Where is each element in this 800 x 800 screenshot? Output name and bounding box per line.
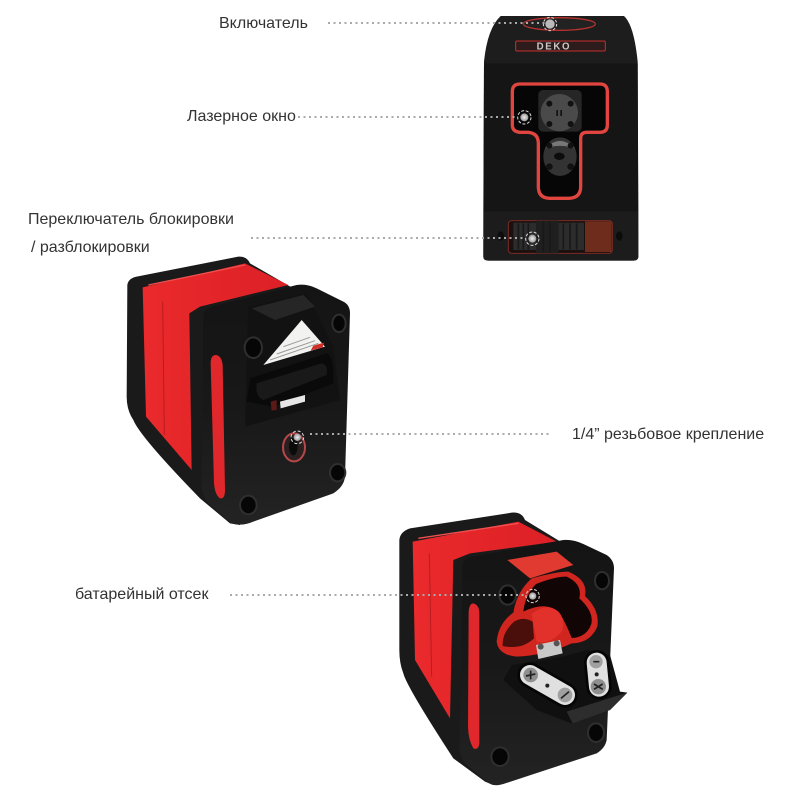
rear face [459, 540, 614, 785]
screw holes [491, 572, 609, 766]
DEKO logo plate: DEKO [537, 42, 571, 53]
DEKO logo plate [516, 41, 605, 53]
device: front view [483, 16, 638, 261]
laser window [512, 84, 607, 198]
power switch [523, 17, 595, 31]
red side panel [413, 522, 557, 718]
battery cover [245, 293, 340, 427]
label: laser window: Лазерное окно [187, 108, 296, 125]
label: lock switch [28, 211, 525, 256]
open battery lid [503, 650, 627, 723]
red side stripe [211, 355, 225, 498]
label: power switch: Включатель [219, 15, 308, 32]
red side stripe [468, 603, 479, 749]
device: open battery compartment [399, 513, 627, 785]
label: thread mount: 1/4” резьбовое крепление [572, 426, 764, 443]
rear face [202, 285, 350, 525]
label: battery compartment: батарейный отсек [75, 586, 209, 603]
lock switch [497, 221, 623, 253]
battery cavity [497, 552, 598, 657]
label: lock switch: / разблокировки [31, 239, 150, 256]
side shell [127, 257, 293, 525]
red side panel [143, 263, 288, 470]
device: rear view [127, 257, 350, 525]
hinge clip [536, 640, 563, 659]
1/4 thread mount [283, 431, 305, 461]
screw holes [240, 315, 346, 514]
label: lock switch: Переключатель блокировки [28, 211, 234, 228]
front body [483, 16, 638, 261]
side shell [399, 513, 563, 785]
